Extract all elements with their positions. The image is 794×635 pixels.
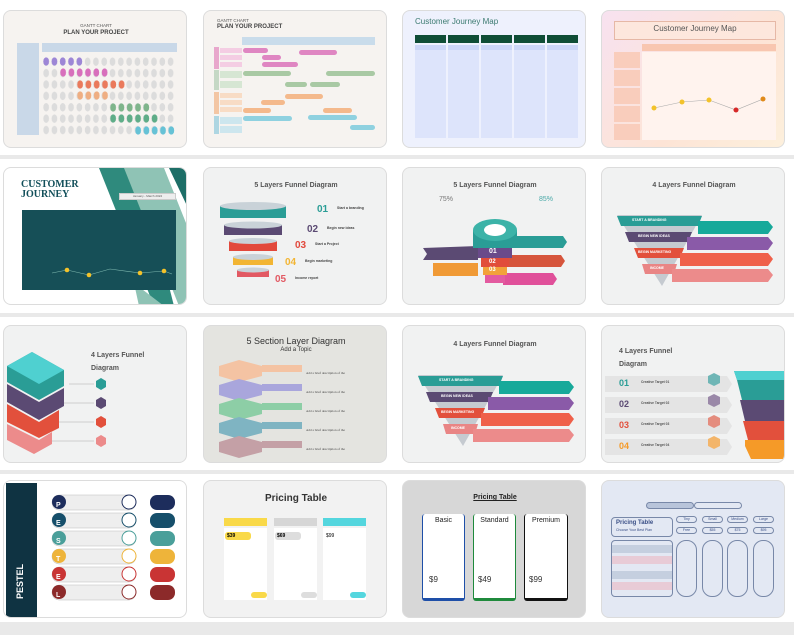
card: pricing table blue: $55 <box>710 528 715 532</box>
card: pricing table light: $39 <box>227 533 235 539</box>
card: pricing table blue <box>601 480 785 618</box>
card: 4 layers funnel numbered <box>601 325 785 463</box>
title <box>611 517 673 537</box>
card: 4 layers funnel banners 2: START A BRANDING <box>439 378 473 382</box>
card: 5 layers funnel discs: 05 <box>275 274 286 285</box>
card: 4 layers funnel numbered: Creative Target 01 <box>641 380 669 384</box>
card: 5 layers funnel discs: 02 <box>307 224 318 235</box>
card: 5 section layer diagram: Add a brief description of the <box>306 390 345 394</box>
card: pricing table blue: Choose Your Best Plan <box>616 528 652 532</box>
numbered list: 01 <box>317 204 328 215</box>
card: 4 layers funnel banners 2: BEGIN MARKETING <box>441 410 474 414</box>
title <box>91 352 144 372</box>
card: pricing table gray: $49 <box>478 575 491 584</box>
title: 5 Layers Funnel Diagram <box>254 182 338 189</box>
card: PESTEL: P <box>56 502 61 509</box>
card: 4 layers funnel banners 2: BEGIN NEW IDEAS <box>441 394 473 398</box>
card: 4 layers funnel numbered: 02 <box>619 399 629 409</box>
card: 4 layers funnel banners: START A BRANDING <box>632 218 666 222</box>
card: 4 layers funnel numbered: Creative Target 04 <box>641 443 669 447</box>
card: pricing table blue: $95 <box>761 528 766 532</box>
card: 4 layers funnel banners 2 <box>402 325 586 463</box>
card: 5 layers funnel ring <box>402 167 586 305</box>
card: 5 section layer diagram: Add a brief description of the <box>306 447 345 451</box>
card: pricing table blue: Small <box>708 517 717 521</box>
card: pricing table blue: $75 <box>735 528 740 532</box>
card: 4 layers funnel numbered: Creative Target 03 <box>641 422 669 426</box>
card: 5 layers funnel ring: 75% <box>439 196 453 203</box>
card: pricing table gray: Premium <box>532 517 560 524</box>
title <box>21 179 79 200</box>
card: customer journey map peach: Customer Journey Map <box>653 24 737 33</box>
card: PESTEL: E <box>56 520 61 527</box>
card: gantt chart dots: PLAN YOUR PROJECT <box>63 30 129 36</box>
title <box>614 21 776 40</box>
table <box>22 210 176 290</box>
title: 4 Layers Funnel Diagram <box>652 182 736 189</box>
title: 4 Layers Funnel Diagram <box>453 341 537 348</box>
card: pricing table gray: Basic <box>435 517 452 524</box>
title: Pricing Table <box>265 493 327 504</box>
card: 4 layers funnel banners: BEGIN NEW IDEAS <box>638 234 670 238</box>
title: Diagram <box>619 361 647 368</box>
card: 5 layers funnel discs: 04 <box>285 257 296 268</box>
card: 5 layers funnel ring: 85% <box>539 196 553 203</box>
card: pricing table blue: Medium <box>731 517 744 521</box>
card: pricing table light <box>203 480 387 618</box>
card: 5 layers funnel discs: Begin marketing <box>305 259 332 263</box>
title: 4 Layers Funnel <box>619 348 672 355</box>
card: 4 layers funnel banners: BEGIN MARKETING <box>638 250 671 254</box>
card: gantt chart bars <box>203 10 387 148</box>
card: 5 section layer diagram <box>203 325 387 463</box>
card: 4 layers funnel cubes <box>3 325 187 463</box>
card: customer journey teal: January - March 2024 <box>133 194 162 198</box>
title: GANTT CHART <box>217 18 249 23</box>
card: pricing table light: $99 <box>326 533 334 539</box>
title: 4 Layers Funnel <box>91 352 144 359</box>
card: 4 layers funnel numbered: Creative Target 02 <box>641 401 669 405</box>
card: 4 layers funnel banners <box>601 167 785 305</box>
card: 4 layers funnel numbered: 01 <box>619 378 629 388</box>
card: gantt chart bars: PLAN YOUR PROJECT <box>217 24 282 30</box>
card: 5 layers funnel discs: 03 <box>295 240 306 251</box>
card: PESTEL <box>3 480 187 618</box>
title: PESTEL <box>15 564 25 599</box>
title: 5 Layers Funnel Diagram <box>453 182 537 189</box>
card: pricing table blue: Tiny <box>683 517 690 521</box>
card: PESTEL: S <box>56 538 61 545</box>
card: 5 layers funnel discs: Start a Project <box>315 242 339 246</box>
title: Pricing Table <box>473 494 517 501</box>
card: customer journey map peach <box>601 10 785 148</box>
card: 5 layers funnel discs <box>203 167 387 305</box>
card: PESTEL: T <box>56 556 60 563</box>
card: pricing table gray: $99 <box>529 575 542 584</box>
card: PESTEL: E <box>56 574 61 581</box>
card: pricing table blue: Large <box>759 517 768 521</box>
title: GANTT CHART <box>80 23 112 28</box>
card: 5 section layer diagram: Add a brief description of the <box>306 409 345 413</box>
card: 5 section layer diagram: Add a brief description of the <box>306 371 345 375</box>
title <box>619 348 672 368</box>
card: 5 section layer diagram: Add a brief description of the <box>306 428 345 432</box>
card: 5 layers funnel discs: Begin new ideas <box>327 226 354 230</box>
card: 5 layers funnel discs: Start a branding <box>337 206 364 210</box>
card: 4 layers funnel banners: INCOME <box>650 266 664 270</box>
card: 5 layers funnel ring: 02 <box>489 259 496 265</box>
journey line <box>652 96 766 112</box>
card: pricing table blue: Pricing Table <box>616 520 653 526</box>
title: Diagram <box>91 365 119 372</box>
card: PESTEL: L <box>56 592 60 599</box>
card: customer journey teal <box>3 167 187 305</box>
card: 5 layers funnel ring: 01 <box>489 248 497 255</box>
card: pricing table gray: $9 <box>429 575 438 584</box>
card: 4 layers funnel banners 2: INCOME <box>451 426 465 430</box>
card: 5 layers funnel discs: Income report <box>295 276 318 280</box>
card: pricing table gray: Standard <box>480 517 509 524</box>
title: CUSTOMER <box>21 179 79 190</box>
card: 5 layers funnel ring: 03 <box>489 267 496 273</box>
card: pricing table blue: Free <box>683 528 690 532</box>
title: 5 Section Layer Diagram <box>246 336 346 346</box>
card: 5 section layer diagram: Add a Topic <box>280 347 312 353</box>
card: customer journey map blue <box>402 10 586 148</box>
title: JOURNEY <box>21 189 69 200</box>
card: pricing table light: $69 <box>277 533 285 539</box>
title: Customer Journey Map <box>415 17 498 26</box>
card: 4 layers funnel numbered: 03 <box>619 420 629 430</box>
card: 4 layers funnel numbered: 04 <box>619 441 629 451</box>
card: pricing table gray <box>402 480 586 618</box>
card: gantt chart dots <box>3 10 187 148</box>
